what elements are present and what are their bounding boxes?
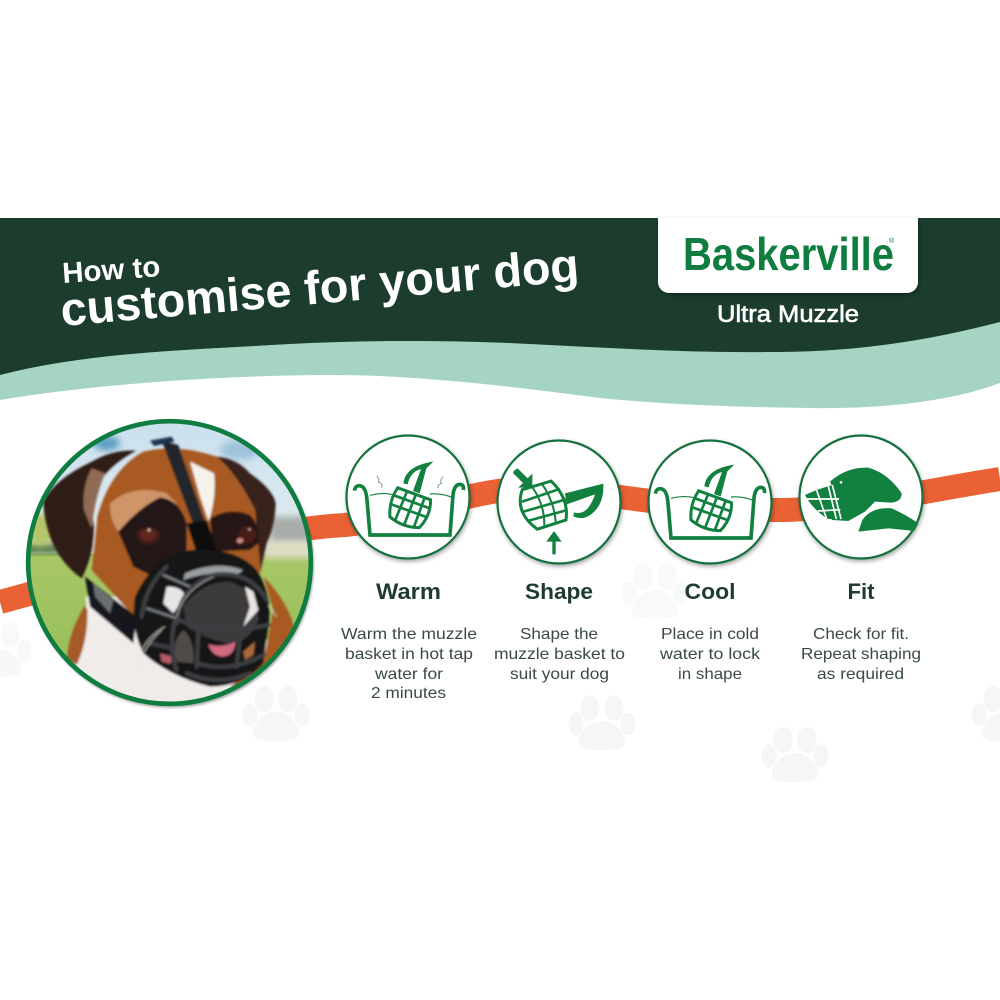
photo ring xyxy=(28,421,311,704)
logo card xyxy=(658,218,918,293)
snout xyxy=(183,582,258,643)
muzzle mass xyxy=(134,550,269,687)
dog head xyxy=(830,468,902,521)
arrow: in xyxy=(513,468,532,488)
title line: How to: How to xyxy=(61,251,161,290)
step icon: shape xyxy=(498,440,620,564)
white blaze xyxy=(190,462,215,522)
step description: Place in cold xyxy=(661,626,759,643)
step: shape xyxy=(494,579,625,683)
step description: suit your dog xyxy=(510,666,609,683)
left ear xyxy=(43,451,136,578)
head strap xyxy=(162,441,205,525)
header band xyxy=(0,218,1000,408)
basin and muzzle xyxy=(655,465,765,538)
step icon: cool xyxy=(648,440,772,564)
step description: Check for fit. xyxy=(813,626,909,643)
dog photo circle xyxy=(23,417,317,710)
background paw prints xyxy=(0,564,1000,782)
photo background xyxy=(31,424,307,554)
head xyxy=(92,448,262,623)
step description: Warm the muzzle xyxy=(341,626,477,643)
muzzle net xyxy=(805,485,841,519)
dark green wave xyxy=(0,218,1000,375)
step description: basket in hot tap xyxy=(345,646,473,663)
step description xyxy=(341,626,477,702)
tongue xyxy=(208,642,235,657)
step: fit xyxy=(801,579,921,683)
step description: water for xyxy=(374,666,444,683)
step heading: Cool xyxy=(684,579,736,604)
step heading: Shape xyxy=(525,579,593,604)
basin and muzzle xyxy=(354,462,464,535)
step: cool xyxy=(659,579,761,683)
step icon: warm xyxy=(346,436,470,558)
product name: Ultra Muzzle xyxy=(717,301,859,328)
dog body xyxy=(858,508,918,532)
step description: water to lock xyxy=(659,646,761,663)
chest xyxy=(70,597,270,707)
title xyxy=(58,238,581,336)
step heading: Warm xyxy=(376,579,441,604)
step description xyxy=(801,626,921,683)
steam xyxy=(377,476,443,488)
orange connecting line xyxy=(0,479,1000,602)
eye sockets xyxy=(118,497,187,577)
step description: as required xyxy=(817,666,904,683)
mint wave xyxy=(0,320,1000,408)
step description xyxy=(659,626,761,683)
step description: Repeat shaping xyxy=(801,646,921,663)
arrow: up xyxy=(546,531,562,554)
step description: muzzle basket to xyxy=(494,646,625,663)
strap xyxy=(565,484,603,518)
step: warm xyxy=(341,579,477,702)
step description: in shape xyxy=(678,666,742,683)
cage bars xyxy=(142,567,268,680)
step description: 2 minutes xyxy=(371,685,446,702)
basket xyxy=(517,479,571,532)
step description xyxy=(494,626,625,683)
step description: Shape the xyxy=(520,626,598,643)
step icon: fit xyxy=(800,436,922,558)
eyes xyxy=(136,526,161,545)
right ear xyxy=(217,457,276,570)
step heading: Fit xyxy=(848,579,875,604)
neck strap xyxy=(85,577,137,643)
registered mark: ® xyxy=(889,237,895,245)
title line: customise for your dog: customise for your dog xyxy=(58,238,581,336)
whiskers xyxy=(141,603,278,654)
logo wordmark: Baskerville xyxy=(683,228,894,280)
